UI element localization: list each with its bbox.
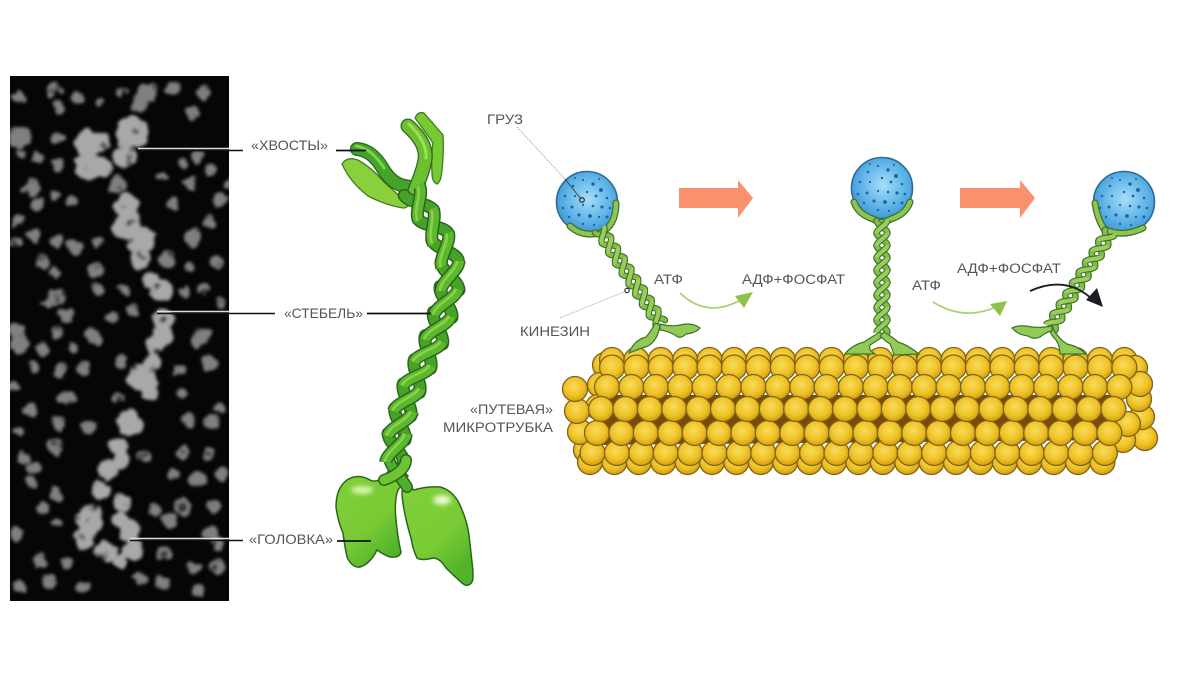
arrow: black swing of stalk [1030, 285, 1103, 307]
feet [1012, 326, 1086, 354]
label: ADP + phosphate 1: АДФ+ФОСФАТ [742, 272, 845, 287]
label: cargo: ГРУЗ [487, 112, 523, 127]
label: microtubule: МИКРОТРУБКА [443, 420, 553, 435]
label: ATP 2: АТФ [912, 278, 941, 293]
label: stalk: «СТЕБЕЛЬ» [284, 305, 363, 321]
illustration: large kinesin molecule [336, 113, 473, 585]
callout line: tails on illustration [336, 150, 366, 152]
label: track: «ПУТЕВАЯ» [470, 402, 553, 417]
label: ADP + phosphate 2: АДФ+ФОСФАТ [957, 261, 1061, 276]
kinesin with cargo: step 3 [1012, 172, 1154, 354]
label: head: «ГОЛОВКА» [249, 531, 333, 547]
cargo vesicle [1094, 172, 1154, 232]
cargo vesicle [556, 172, 618, 232]
panel: micrograph of kinesin [9, 76, 231, 601]
callout line: tails from photo [138, 148, 243, 150]
arrow: salmon direction 1 [679, 180, 753, 218]
callout line: head from photo [130, 538, 243, 540]
label: kinesin: КИНЕЗИН [520, 324, 590, 339]
arrow: green ATP reaction 1 [680, 292, 753, 308]
callout line: stalk on illustration [367, 312, 431, 314]
feet [629, 323, 700, 353]
cargo grip [570, 203, 616, 234]
kinesin with cargo: step 2 [845, 158, 919, 355]
cargo grip [1095, 203, 1143, 233]
cargo grip [854, 202, 910, 223]
twisted stalk [595, 226, 665, 327]
microtubule track [562, 348, 1158, 474]
callout line: kinesin [560, 288, 629, 318]
label: tails: «ХВОСТЫ» [251, 137, 328, 153]
kinesin heads [336, 462, 473, 585]
arrow: salmon direction 2 [960, 180, 1035, 218]
feet [845, 332, 919, 355]
bright kinesin molecule in micrograph [74, 116, 173, 567]
label: ATP 1: АТФ [654, 272, 683, 287]
callout line: stalk from photo [157, 312, 275, 314]
twisted stalk [1046, 229, 1115, 331]
kinesin with cargo: step 1 [556, 172, 700, 353]
cargo vesicle [852, 158, 912, 218]
twisted stalk [876, 220, 888, 333]
callout line: cargo [517, 127, 584, 202]
arrow: green ATP reaction 2 [933, 301, 1007, 316]
kinesin coiled-coil stalk [384, 186, 459, 487]
kinesin tails [342, 113, 443, 208]
callout line: head on illustration [337, 540, 371, 542]
